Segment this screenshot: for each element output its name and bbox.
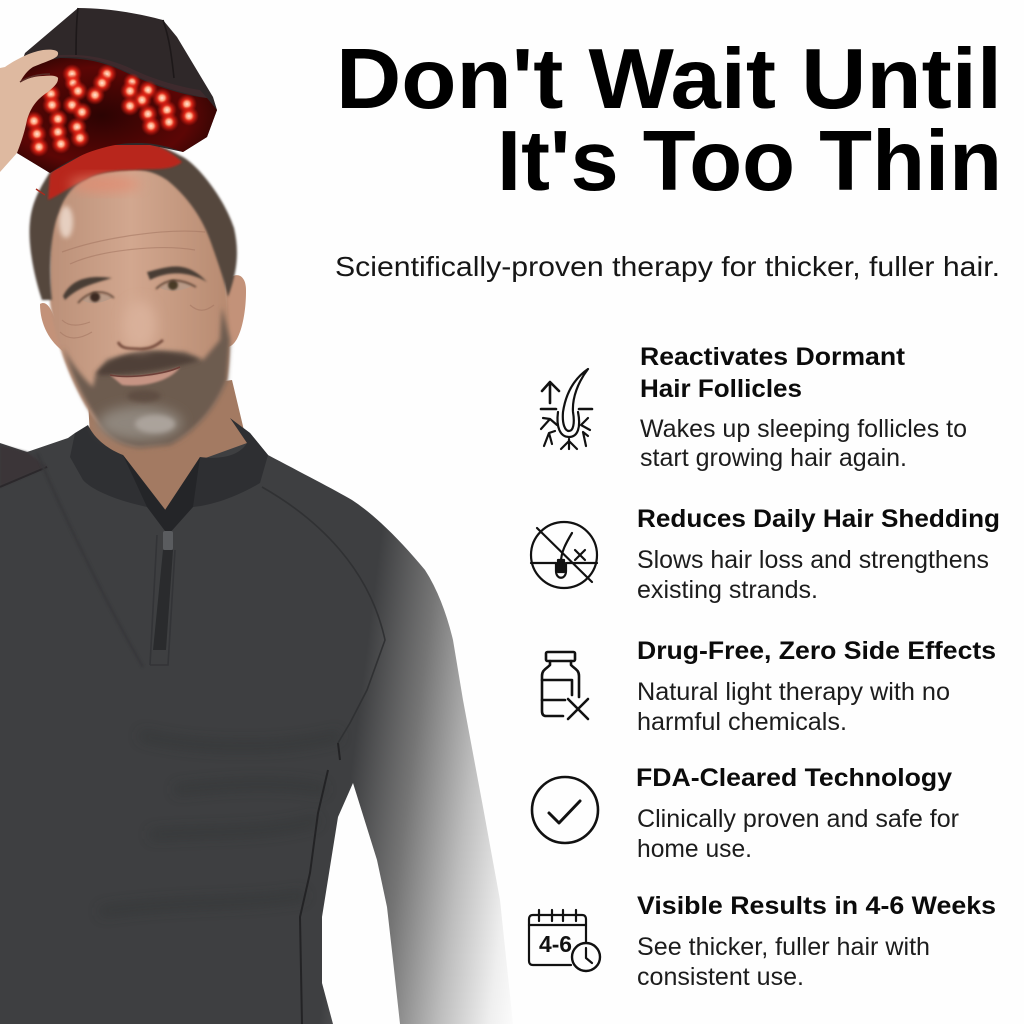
benefit: FDA cleared — [532, 764, 959, 863]
shirt with sleeve fading to white — [0, 418, 513, 1024]
benefit: visible results: See thicker, fuller hair with — [637, 933, 930, 961]
icon: check in circle — [532, 777, 598, 843]
benefit: drug-free: Drug-Free, Zero Side Effects — [637, 637, 996, 665]
forehead highlight — [59, 206, 73, 238]
benefit: reactivates follicles — [541, 343, 967, 472]
eyes and eyebrows — [63, 266, 207, 303]
benefit: drug-free: Natural light therapy with no — [637, 678, 950, 706]
icon: calendar with clock: 4-6 — [539, 931, 572, 957]
beard — [63, 307, 230, 448]
hand holding cap — [0, 50, 58, 172]
benefit: FDA cleared: home use. — [637, 835, 752, 863]
red light cap — [5, 8, 217, 173]
collar and zipper — [70, 418, 268, 665]
benefit: reactivates follicles: Hair Follicles — [640, 375, 802, 403]
benefit: reactivates follicles: start growing hair again. — [640, 444, 907, 472]
hair — [30, 136, 237, 300]
man wearing a red-light therapy cap — [0, 8, 513, 1024]
icon: medicine bottle with X — [542, 652, 588, 719]
icon: hair follicle with roots — [541, 369, 592, 449]
nose — [118, 301, 163, 349]
ears — [40, 275, 246, 352]
benefit: reduces shedding — [531, 505, 1000, 604]
icon: crossed-out hair — [531, 522, 597, 588]
icon: calendar with clock — [529, 910, 600, 971]
title: Don't Wait Until — [336, 32, 1002, 127]
neck — [88, 380, 247, 512]
benefit: visible results: consistent use. — [637, 963, 804, 991]
benefit: reduces shedding: Slows hair loss and strengthens — [637, 546, 989, 574]
benefit: reduces shedding: Reduces Daily Hair Shedding — [637, 505, 1000, 533]
benefit: visible results — [529, 892, 996, 991]
benefit: FDA cleared: Clinically proven and safe for — [637, 805, 959, 833]
benefit: drug-free: harmful chemicals. — [637, 708, 847, 736]
benefit: reactivates follicles: Wakes up sleeping follicles to — [640, 415, 967, 443]
benefit: reduces shedding: existing strands. — [637, 576, 818, 604]
LEDs — [24, 64, 199, 157]
forehead wrinkles and cheek lines — [60, 231, 214, 338]
mouth and moustache — [95, 352, 200, 386]
benefit: visible results: Visible Results in 4-6 Weeks — [637, 892, 996, 920]
cap underside — [7, 58, 217, 173]
subtitle: Scientifically-proven therapy for thicker, fuller hair. — [335, 251, 1000, 282]
benefit: drug-free — [542, 637, 996, 736]
title — [336, 32, 1002, 209]
title: It's Too Thin — [497, 114, 1002, 209]
benefit: FDA cleared: FDA-Cleared Technology — [636, 764, 952, 792]
benefit: reactivates follicles: Reactivates Dormant — [640, 343, 906, 371]
face — [50, 166, 230, 447]
